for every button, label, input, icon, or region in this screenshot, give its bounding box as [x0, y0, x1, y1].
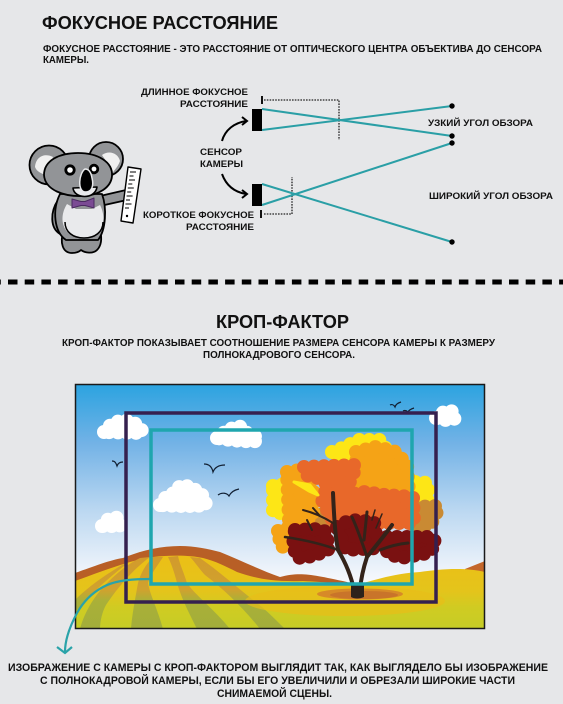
illustration: landscape photo [75, 384, 485, 629]
text block: focal length definition: КАМЕРЫ. [43, 55, 89, 66]
icon: koala with ruler [30, 142, 141, 253]
arrow: crop to caption [57, 579, 150, 653]
text block: focal length definition: ФОКУСНОЕ РАССТОЯНИЕ - ЭТО РАССТОЯНИЕ ОТ ОПТИЧЕСКОГО ЦЕНТРА ОБЪЕКТИВА ДО СЕНСОРА [43, 44, 543, 55]
foreground [245, 596, 445, 616]
label: long focal length: ДЛИННОЕ ФОКУСНОЕ [141, 87, 249, 98]
focal length diagram [141, 87, 553, 245]
koala feet [62, 230, 101, 253]
icon: sensor long [252, 109, 262, 131]
label: wide angle: ШИРОКИЙ УГОЛ ОБЗОРА [429, 190, 553, 202]
label: camera sensor: КАМЕРЫ [200, 159, 243, 170]
far hill [76, 546, 348, 582]
text block: focal length definition [43, 44, 543, 66]
tree crown [273, 440, 438, 558]
frame border [76, 384, 484, 628]
koala ear right [89, 142, 123, 176]
dashed divider [0, 280, 563, 284]
tree trunk and branches [285, 493, 408, 590]
koala torso [55, 194, 105, 240]
label: short focal length: РАССТОЯНИЕ [186, 222, 255, 233]
koala ear left [30, 146, 68, 184]
koala chin [73, 187, 97, 196]
orange foliage [278, 447, 409, 547]
koala eye right [90, 165, 98, 173]
dotted measure: short focal length [261, 177, 292, 218]
koala head [44, 153, 112, 196]
field stripes [75, 556, 285, 629]
text block: crop factor definition [62, 338, 496, 361]
koala eye left [66, 166, 74, 174]
text block: caption: ИЗОБРАЖЕНИЕ С КАМЕРЫ С КРОП-ФАКТОРОМ ВЫГЛЯДИТ ТАК, КАК ВЫГЛЯДЕЛО БЫ ИЗОБРАЖЕНИЕ [8, 662, 548, 674]
text block: caption: СНИМАЕМОЙ СЦЕНЫ. [217, 687, 332, 700]
ruler [121, 167, 141, 223]
crop rectangle [151, 430, 412, 584]
bow tie [72, 198, 94, 208]
label: camera sensor [200, 147, 243, 170]
text block: crop factor definition: КРОП-ФАКТОР ПОКАЗЫВАЕТ СООТНОШЕНИЕ РАЗМЕРА СЕНСОРА КАМЕРЫ К РАЗМЕРУ [62, 338, 496, 349]
rays: wide angle of view [262, 143, 452, 242]
dark red foliage [293, 520, 436, 558]
arrow: sensor up [222, 117, 247, 141]
koala belly [63, 204, 103, 238]
heading: crop factor: КРОП-ФАКТОР [216, 311, 349, 332]
endpoint dots [449, 103, 455, 245]
yellow patch [294, 482, 318, 495]
label: long focal length: РАССТОЯНИЕ [180, 99, 249, 110]
tree base [351, 585, 364, 598]
clouds [102, 411, 455, 526]
text block: caption [8, 662, 548, 700]
koala left arm [52, 200, 68, 234]
koala nose [80, 169, 93, 192]
icon: sensor short [252, 184, 262, 206]
yellow foliage [273, 440, 428, 513]
text block: crop factor definition: ПОЛНОКАДРОВОГО СЕНСОРА. [203, 350, 355, 361]
label: short focal length: КОРОТКОЕ ФОКУСНОЕ [143, 210, 255, 221]
tan foliage [303, 506, 438, 526]
text block: caption: С ПОЛНОКАДРОВОЙ КАМЕРЫ, ЕСЛИ БЫ ЕГО УВЕЛИЧИЛИ И ОБРЕЗАЛИ ШИРОКИЕ ЧАСТИ [40, 674, 515, 687]
sky [75, 384, 485, 589]
right far hill [465, 562, 484, 572]
tree shadow [317, 588, 403, 600]
label: camera sensor: СЕНСОР [200, 147, 243, 158]
full-frame rectangle [126, 413, 436, 602]
label: short focal length [143, 210, 255, 233]
birds [112, 402, 414, 496]
label: narrow angle: УЗКИЙ УГОЛ ОБЗОРА [428, 117, 533, 129]
koala arm [100, 190, 127, 206]
rays: narrow angle of view [262, 106, 452, 136]
field [75, 556, 485, 629]
title: focal length: ФОКУСНОЕ РАССТОЯНИЕ [42, 12, 278, 33]
dark orange foliage [304, 465, 414, 523]
label: long focal length [141, 87, 249, 110]
dotted measure: long focal length [262, 96, 339, 140]
arrow: sensor down [222, 174, 247, 198]
